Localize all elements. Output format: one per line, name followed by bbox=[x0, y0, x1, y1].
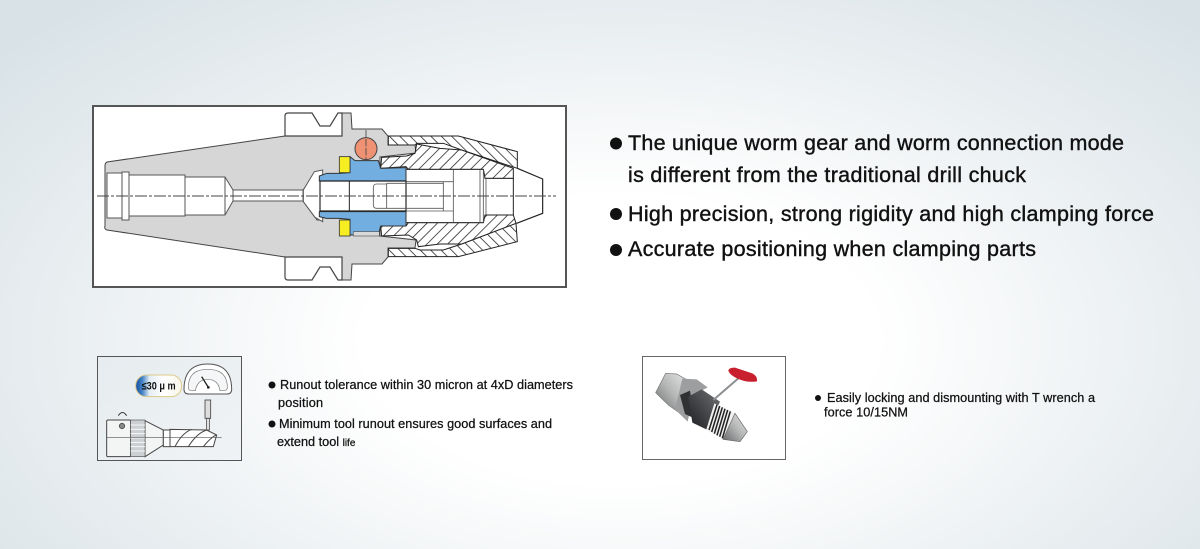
feature line 2: is different from the traditional drill chuck bbox=[628, 163, 1026, 187]
callout: 30 micron: ≤30 μ m bbox=[142, 380, 176, 392]
chuck head bbox=[303, 130, 543, 257]
icon: dial gauge bbox=[184, 364, 232, 430]
runout line 1: Runout tolerance within 30 micron at 4xD diameters bbox=[280, 378, 573, 392]
bullet bbox=[815, 395, 821, 401]
flange top bbox=[285, 113, 342, 136]
wrench line 1: Easily locking and dismounting with T wrench a bbox=[827, 391, 1096, 405]
yellow ring bottom bbox=[339, 220, 350, 236]
bullet 1 bbox=[610, 138, 622, 150]
text block: wrench note bbox=[815, 391, 1096, 420]
flange bottom bbox=[285, 257, 342, 280]
internal bore bbox=[107, 172, 322, 220]
nose cone bbox=[517, 168, 543, 223]
tool tip bbox=[373, 183, 443, 208]
feature line 3: High precision, strong rigidity and high clamping force bbox=[628, 202, 1154, 226]
text block: runout notes bbox=[268, 378, 573, 449]
wrench handle bbox=[728, 368, 757, 382]
panel: runout illustration bbox=[98, 356, 242, 460]
outer sleeve top hatch bbox=[388, 136, 517, 168]
runout line 4: extend tool life bbox=[277, 435, 356, 449]
lower stipple strip bbox=[353, 232, 379, 236]
jaw bottom hatch bbox=[381, 215, 516, 247]
icon: chuck with T wrench bbox=[656, 368, 757, 442]
bullet 3 bbox=[610, 244, 622, 256]
panel: chuck cross-section diagram bbox=[93, 106, 566, 287]
runout line 2: position bbox=[278, 396, 323, 410]
centre line bbox=[97, 195, 556, 197]
taper shank body bbox=[105, 113, 416, 280]
jaw top hatch bbox=[381, 144, 513, 178]
runout line 3: Minimum tool runout ensures good surfaces and bbox=[279, 417, 552, 431]
wrench bar bbox=[713, 378, 738, 400]
blue worm gear top bbox=[319, 157, 406, 181]
bullet bbox=[268, 420, 276, 428]
icon: chuck and drill bbox=[107, 412, 222, 457]
bore ring bbox=[303, 170, 323, 222]
feature line 4: Accurate positioning when clamping parts bbox=[628, 237, 1036, 261]
worm ball bbox=[355, 138, 377, 160]
text block: main features bbox=[610, 131, 1154, 261]
blue worm gear bottom bbox=[319, 212, 406, 235]
yellow ring top bbox=[339, 157, 350, 173]
bullet 2 bbox=[610, 208, 622, 220]
bullet bbox=[268, 382, 276, 388]
inner bore bbox=[406, 169, 513, 223]
wrench line 2: force 10/15NM bbox=[824, 406, 908, 420]
inner sleeve bore bbox=[320, 181, 406, 211]
outer sleeve bottom hatch bbox=[388, 223, 517, 257]
panel: T wrench photo bbox=[642, 356, 786, 460]
feature line 1: The unique worm gear and worm connection mode bbox=[628, 131, 1124, 155]
